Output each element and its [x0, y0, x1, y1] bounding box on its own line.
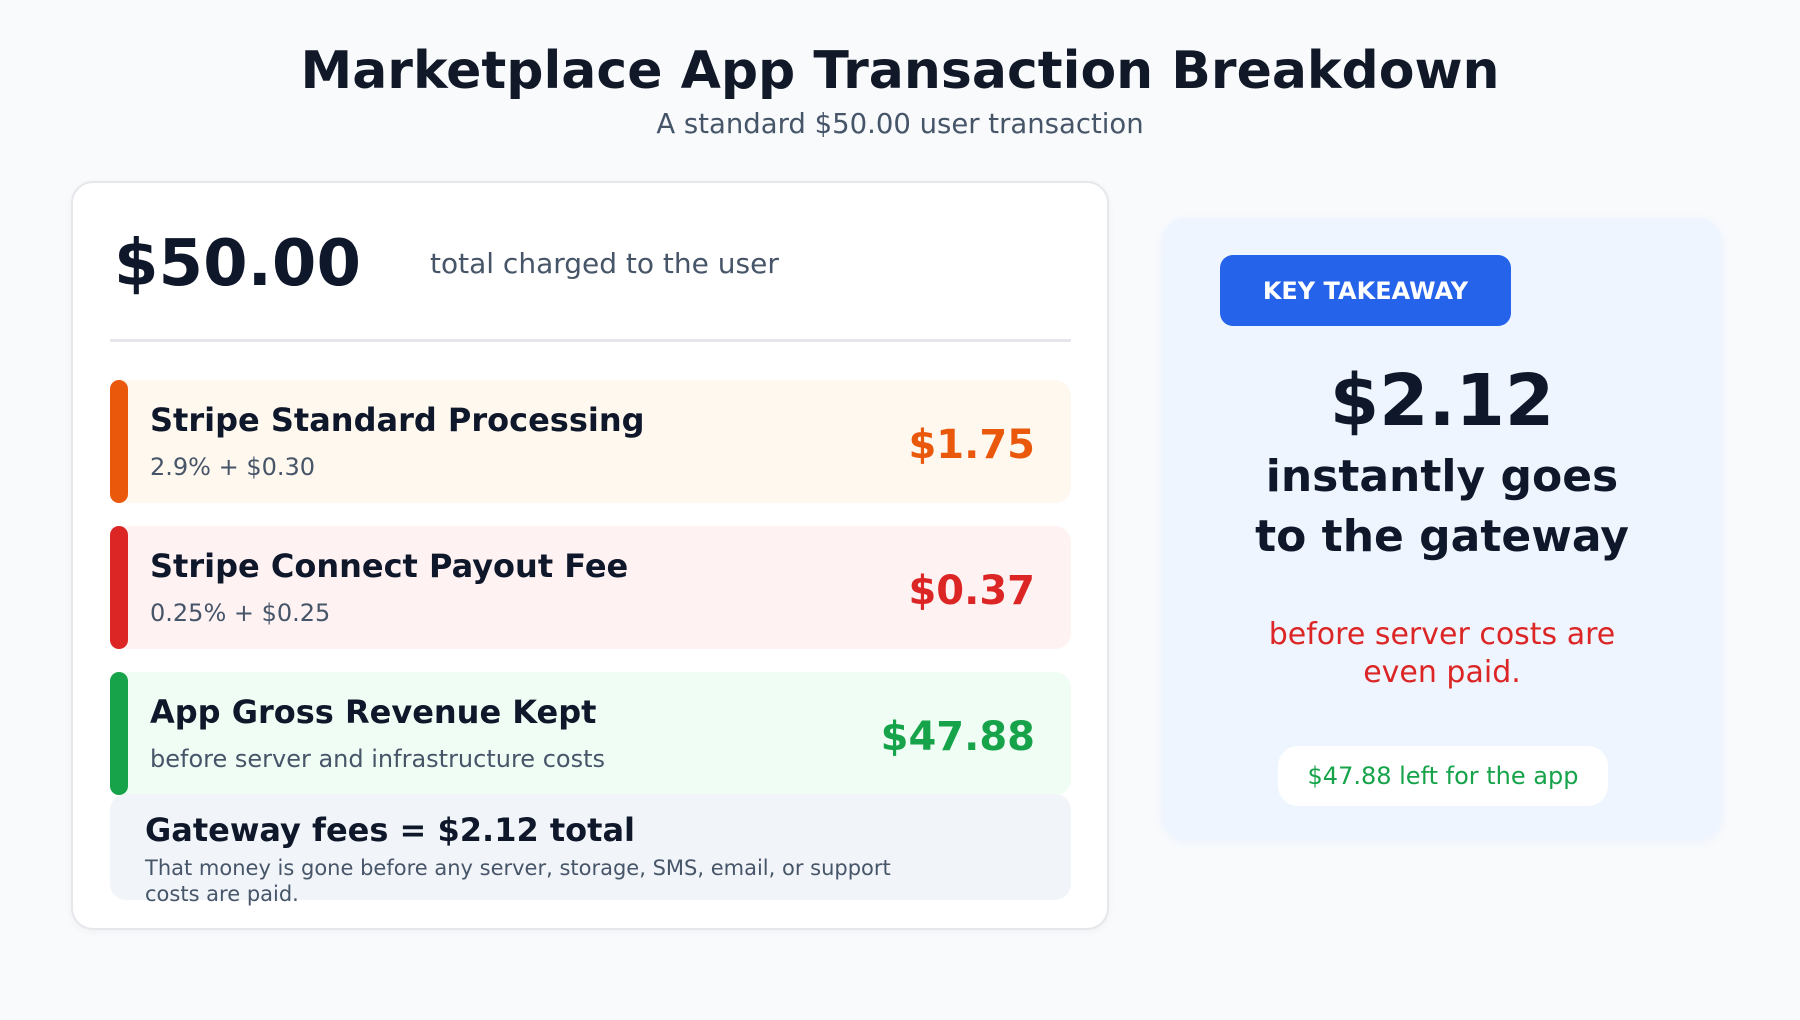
row: connect payout: 0.25% + $0.25	[150, 599, 330, 627]
gateway fees summary	[110, 794, 1071, 900]
badge	[1220, 255, 1511, 326]
red note	[1269, 617, 1615, 690]
gateway fees summary: That money is gone before any server, storage, SMS, email, or support costs are paid.	[145, 856, 891, 906]
gateway fees summary: Gateway fees = $2.12 total	[145, 811, 635, 849]
panel: key takeaway	[1162, 218, 1722, 840]
row: stripe processing: $1.75	[908, 422, 1035, 468]
total label: total charged to the user	[430, 247, 779, 280]
subtitle: A standard $50.00 user transaction	[656, 108, 1144, 140]
row: gross revenue: before server and infrastructure costs	[150, 745, 605, 773]
pill: $47.88 left for the app	[1308, 762, 1578, 790]
row: stripe processing: 2.9% + $0.30	[150, 453, 315, 481]
badge: KEY TAKEAWAY	[1263, 277, 1468, 305]
row: connect payout: $0.37	[908, 568, 1035, 614]
title: Marketplace App Transaction Breakdown	[300, 41, 1500, 101]
row: stripe processing: Stripe Standard Processing	[150, 401, 645, 439]
red note: before server costs are	[1269, 617, 1615, 652]
pill	[1278, 746, 1608, 806]
panel: breakdown card	[71, 181, 1109, 930]
statement: instantly goes	[1266, 451, 1618, 502]
row: connect payout	[110, 526, 1071, 649]
big number: $2.12	[1330, 359, 1554, 442]
row: gross revenue: App Gross Revenue Kept	[150, 693, 596, 731]
row: gross revenue	[110, 672, 1071, 795]
row: gross revenue: $47.88	[881, 714, 1035, 760]
row: stripe processing	[110, 380, 1071, 503]
statement	[1255, 451, 1629, 562]
row: connect payout: Stripe Connect Payout Fee	[150, 547, 628, 585]
statement: to the gateway	[1255, 511, 1629, 562]
total amount: $50.00	[114, 227, 361, 301]
red note: even paid.	[1363, 655, 1521, 690]
